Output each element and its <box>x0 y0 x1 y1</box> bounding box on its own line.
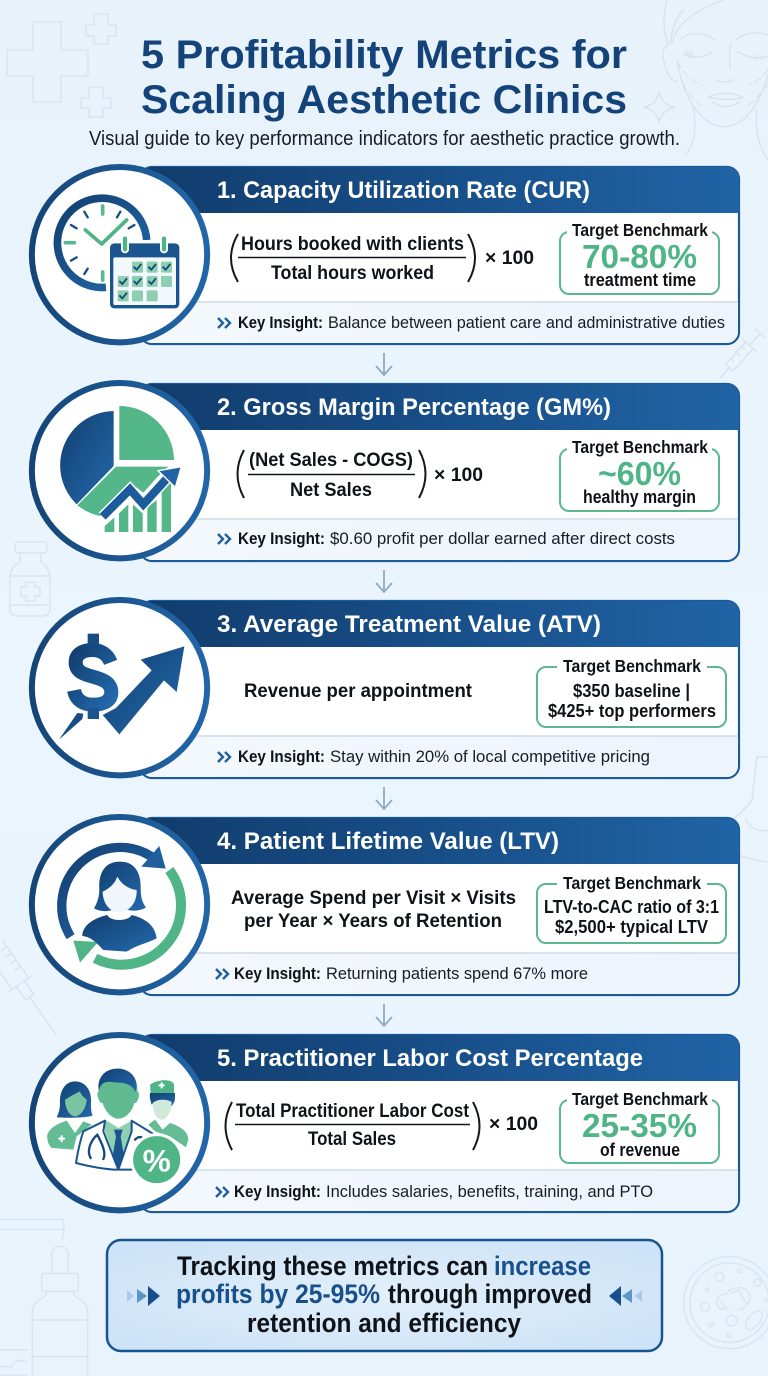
subtitle: Visual guide to key performance indicators for aesthetic practice growth. <box>89 127 680 150</box>
icon badge: medical team with percent <box>32 1035 207 1210</box>
benchmark <box>537 656 726 727</box>
arrow: 3 to 4 <box>376 787 392 809</box>
heading: 3. Average Treatment Value (ATV) <box>217 611 601 638</box>
formula: Total hours worked <box>271 262 434 284</box>
icon badge: clock and calendar <box>32 167 207 342</box>
formula: per Year × Years of Retention <box>244 910 502 932</box>
key insight: $0.60 profit per dollar earned after direct costs <box>330 529 675 548</box>
background decoration: petri dish <box>684 1257 768 1349</box>
benchmark: Target Benchmark <box>572 1089 708 1109</box>
benchmark <box>560 437 719 511</box>
heading: 2. Gross Margin Percentage (GM%) <box>217 394 611 421</box>
background decoration: syringe right <box>713 327 767 384</box>
background decoration: flask right <box>722 757 768 862</box>
heading: 1. Capacity Utilization Rate (CUR) <box>217 177 590 204</box>
key insight: Stay within 20% of local competitive pricing <box>330 747 650 766</box>
panel: metric 2 gross margin <box>32 383 739 561</box>
formula <box>231 887 516 932</box>
formula <box>231 233 534 284</box>
icon badge: medical team with percent: % <box>143 1142 171 1178</box>
benchmark: of revenue <box>600 1140 680 1160</box>
icon badge: pie chart and growth arrow <box>32 383 207 558</box>
arrow: 1 to 2 <box>376 353 392 375</box>
formula: × 100 <box>489 1113 538 1135</box>
formula: Hours booked with clients <box>241 233 464 255</box>
formula: Total Sales <box>308 1128 396 1150</box>
panel: metric 4 patient lifetime value <box>32 817 739 995</box>
key insight: Returning patients spend 67% more <box>326 964 588 983</box>
key insight: Key Insight: <box>238 529 325 548</box>
benchmark: ~60% <box>598 455 681 492</box>
title: 5 Profitability Metrics for <box>141 33 627 77</box>
title <box>141 33 627 122</box>
arrow: 2 to 3 <box>376 570 392 592</box>
benchmark <box>560 220 719 294</box>
callout: summary: retention and efficiency <box>247 1308 521 1338</box>
heading: 4. Patient Lifetime Value (LTV) <box>217 828 559 855</box>
callout: summary <box>107 1240 662 1351</box>
formula: × 100 <box>485 247 534 269</box>
icon: left chevrons <box>127 1286 160 1306</box>
background decoration: dropper bottle and jar <box>0 1219 88 1376</box>
benchmark: Target Benchmark <box>563 656 701 676</box>
background decoration: medicine bottle <box>10 542 50 616</box>
benchmark: $2,500+ typical LTV <box>555 917 708 937</box>
callout: summary: Tracking these metrics can <box>177 1251 488 1281</box>
key insight: Key Insight: <box>238 313 323 332</box>
benchmark <box>537 873 726 943</box>
panel: metric 3 average treatment value <box>32 600 739 778</box>
icon: right chevrons <box>609 1286 642 1306</box>
benchmark: $350 baseline | <box>573 681 690 701</box>
key insight: Key Insight: <box>238 747 325 766</box>
benchmark: $425+ top performers <box>548 701 716 721</box>
callout: summary: increase <box>494 1251 591 1281</box>
benchmark: LTV-to-CAC ratio of 3:1 <box>544 897 719 917</box>
formula <box>226 1100 538 1150</box>
icon badge: dollar sign and rising arrow <box>32 600 207 775</box>
benchmark: treatment time <box>584 270 696 290</box>
callout: summary: through improved <box>388 1279 592 1309</box>
benchmark: 25-35% <box>582 1107 697 1144</box>
key insight: Key Insight: <box>234 1182 321 1201</box>
formula: Total Practitioner Labor Cost <box>236 1100 469 1122</box>
benchmark: Target Benchmark <box>572 437 708 457</box>
icon badge: patient with retention cycle <box>32 817 207 992</box>
formula: Average Spend per Visit × Visits <box>231 887 516 909</box>
benchmark: Target Benchmark <box>563 873 701 893</box>
benchmark: 70-80% <box>582 238 697 275</box>
background decoration: medical crosses <box>7 14 116 117</box>
formula: Revenue per appointment <box>244 680 472 702</box>
background decoration: syringe left <box>0 938 67 1042</box>
key insight: Includes salaries, benefits, training, and PTO <box>326 1182 653 1201</box>
title: Scaling Aesthetic Clinics <box>141 78 627 122</box>
formula: × 100 <box>434 464 483 486</box>
formula: (Net Sales - COGS) <box>249 449 413 471</box>
formula <box>238 449 483 501</box>
panel: metric 5 practitioner labor cost <box>32 1035 739 1212</box>
key insight: Key Insight: <box>234 964 321 983</box>
callout: summary: profits by 25-95% <box>176 1279 380 1309</box>
arrow: 4 to 5 <box>376 1004 392 1026</box>
benchmark: healthy margin <box>583 487 696 507</box>
benchmark <box>560 1089 719 1163</box>
formula: Net Sales <box>290 479 372 501</box>
background decoration: face illustration <box>645 0 768 159</box>
key insight <box>216 964 588 983</box>
key insight: Balance between patient care and administrative duties <box>328 313 725 332</box>
heading: 5. Practitioner Labor Cost Percentage <box>217 1045 643 1072</box>
benchmark: Target Benchmark <box>572 220 708 240</box>
panel: metric 1 capacity utilization <box>32 167 739 344</box>
